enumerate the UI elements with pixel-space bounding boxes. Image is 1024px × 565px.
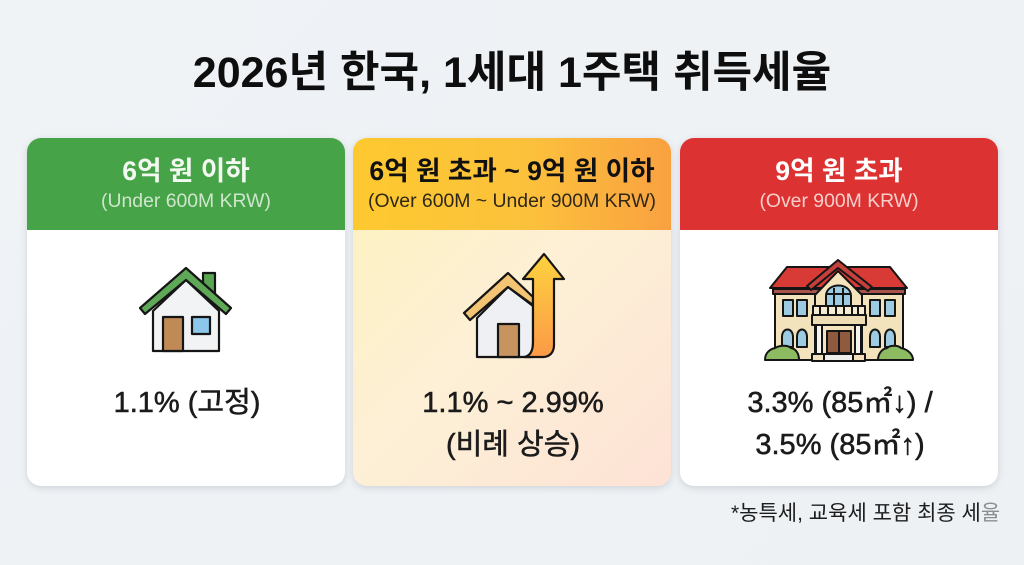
rate: 1.1% to 2.99%: 1.1% ~ 2.99%: [422, 387, 604, 419]
icon: house with rising arrow: [462, 252, 566, 358]
header: over 900M: (Over 900M KRW): [759, 190, 919, 212]
rate: 3.3% and 3.5%: [747, 386, 933, 461]
rate: 3.3% and 3.5%: 3.3% (85㎡↓) /: [747, 387, 933, 419]
footnote: *농특세, 교육세 포함 최종 세율: [731, 502, 1000, 525]
header: under 600M: (Under 600M KRW): [101, 190, 271, 212]
icon: mansion: [764, 259, 914, 362]
title: 2026년 한국, 1세대 1주택 취득세율: [193, 49, 831, 97]
header: under 600M: 6억 원 이하: [122, 156, 250, 186]
icon: small house: [138, 266, 232, 352]
header: over 900M: 9억 원 초과: [775, 156, 903, 186]
panel: 600M to 900M KRW: [353, 138, 671, 486]
rate: 1.1% fixed: 1.1% (고정): [114, 387, 260, 419]
header: 600M to 900M: 6억 원 초과 ~ 9억 원 이하: [369, 156, 655, 186]
panel: under 600M KRW: [27, 138, 345, 486]
header: 600M to 900M: (Over 600M ~ Under 900M KRW): [368, 190, 656, 212]
rate: 3.3% and 3.5%: 3.5% (85㎡↑): [755, 429, 925, 461]
header: under 600M: [27, 138, 345, 230]
rate: 1.1% to 2.99%: [422, 387, 604, 461]
header: over 900M: [680, 138, 998, 230]
header: 600M to 900M: [353, 138, 671, 230]
panel: over 900M KRW: [680, 138, 998, 486]
rate: 1.1% to 2.99%: (비례 상승): [446, 429, 580, 461]
